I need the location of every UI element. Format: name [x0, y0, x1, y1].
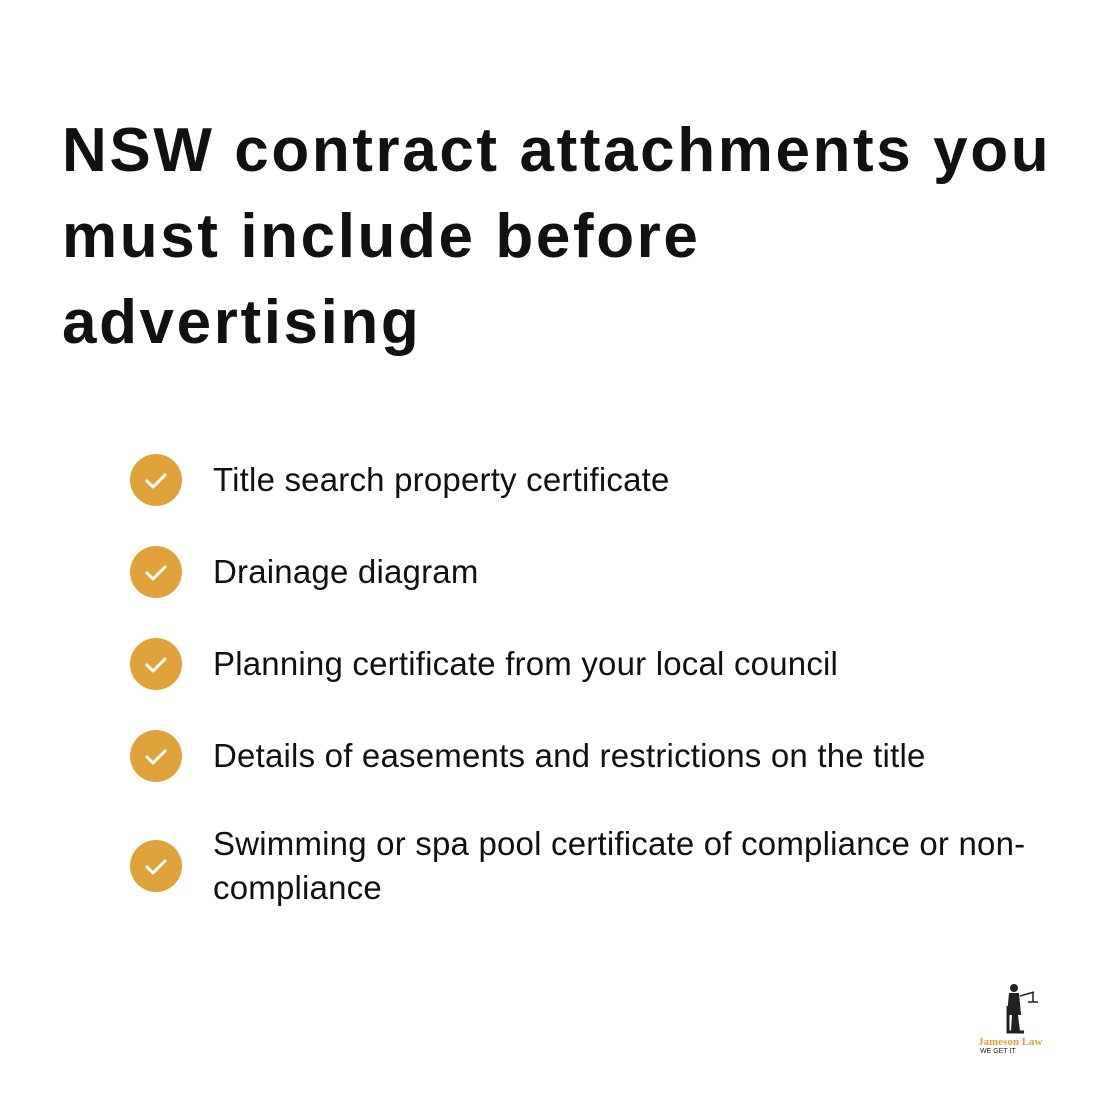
item 1 [130, 454, 670, 506]
item 5: compliance [213, 869, 382, 906]
logo: WE GET IT [980, 1048, 1016, 1055]
icon: check [130, 840, 182, 892]
icon: check [130, 638, 182, 690]
title [62, 116, 1051, 357]
icon: check [130, 730, 182, 782]
title: must include before [62, 202, 700, 271]
title: advertising [62, 288, 421, 357]
logo [978, 984, 1042, 1055]
item 5: Swimming or spa pool certificate of compliance or non- [213, 825, 1025, 862]
item 5 [130, 825, 1025, 906]
item 1: Title search property certificate [213, 461, 670, 498]
icon: check [130, 546, 182, 598]
icon: justice figure [1006, 984, 1038, 1034]
title: NSW contract attachments you [62, 116, 1051, 185]
item 2: Drainage diagram [213, 553, 479, 590]
icon: check [130, 454, 182, 506]
item 2 [130, 546, 479, 598]
item 3 [130, 638, 838, 690]
item 4 [130, 730, 926, 782]
item 4: Details of easements and restrictions on the title [213, 737, 926, 774]
item 3: Planning certificate from your local council [213, 645, 838, 682]
logo: Jameson Law [978, 1036, 1042, 1048]
